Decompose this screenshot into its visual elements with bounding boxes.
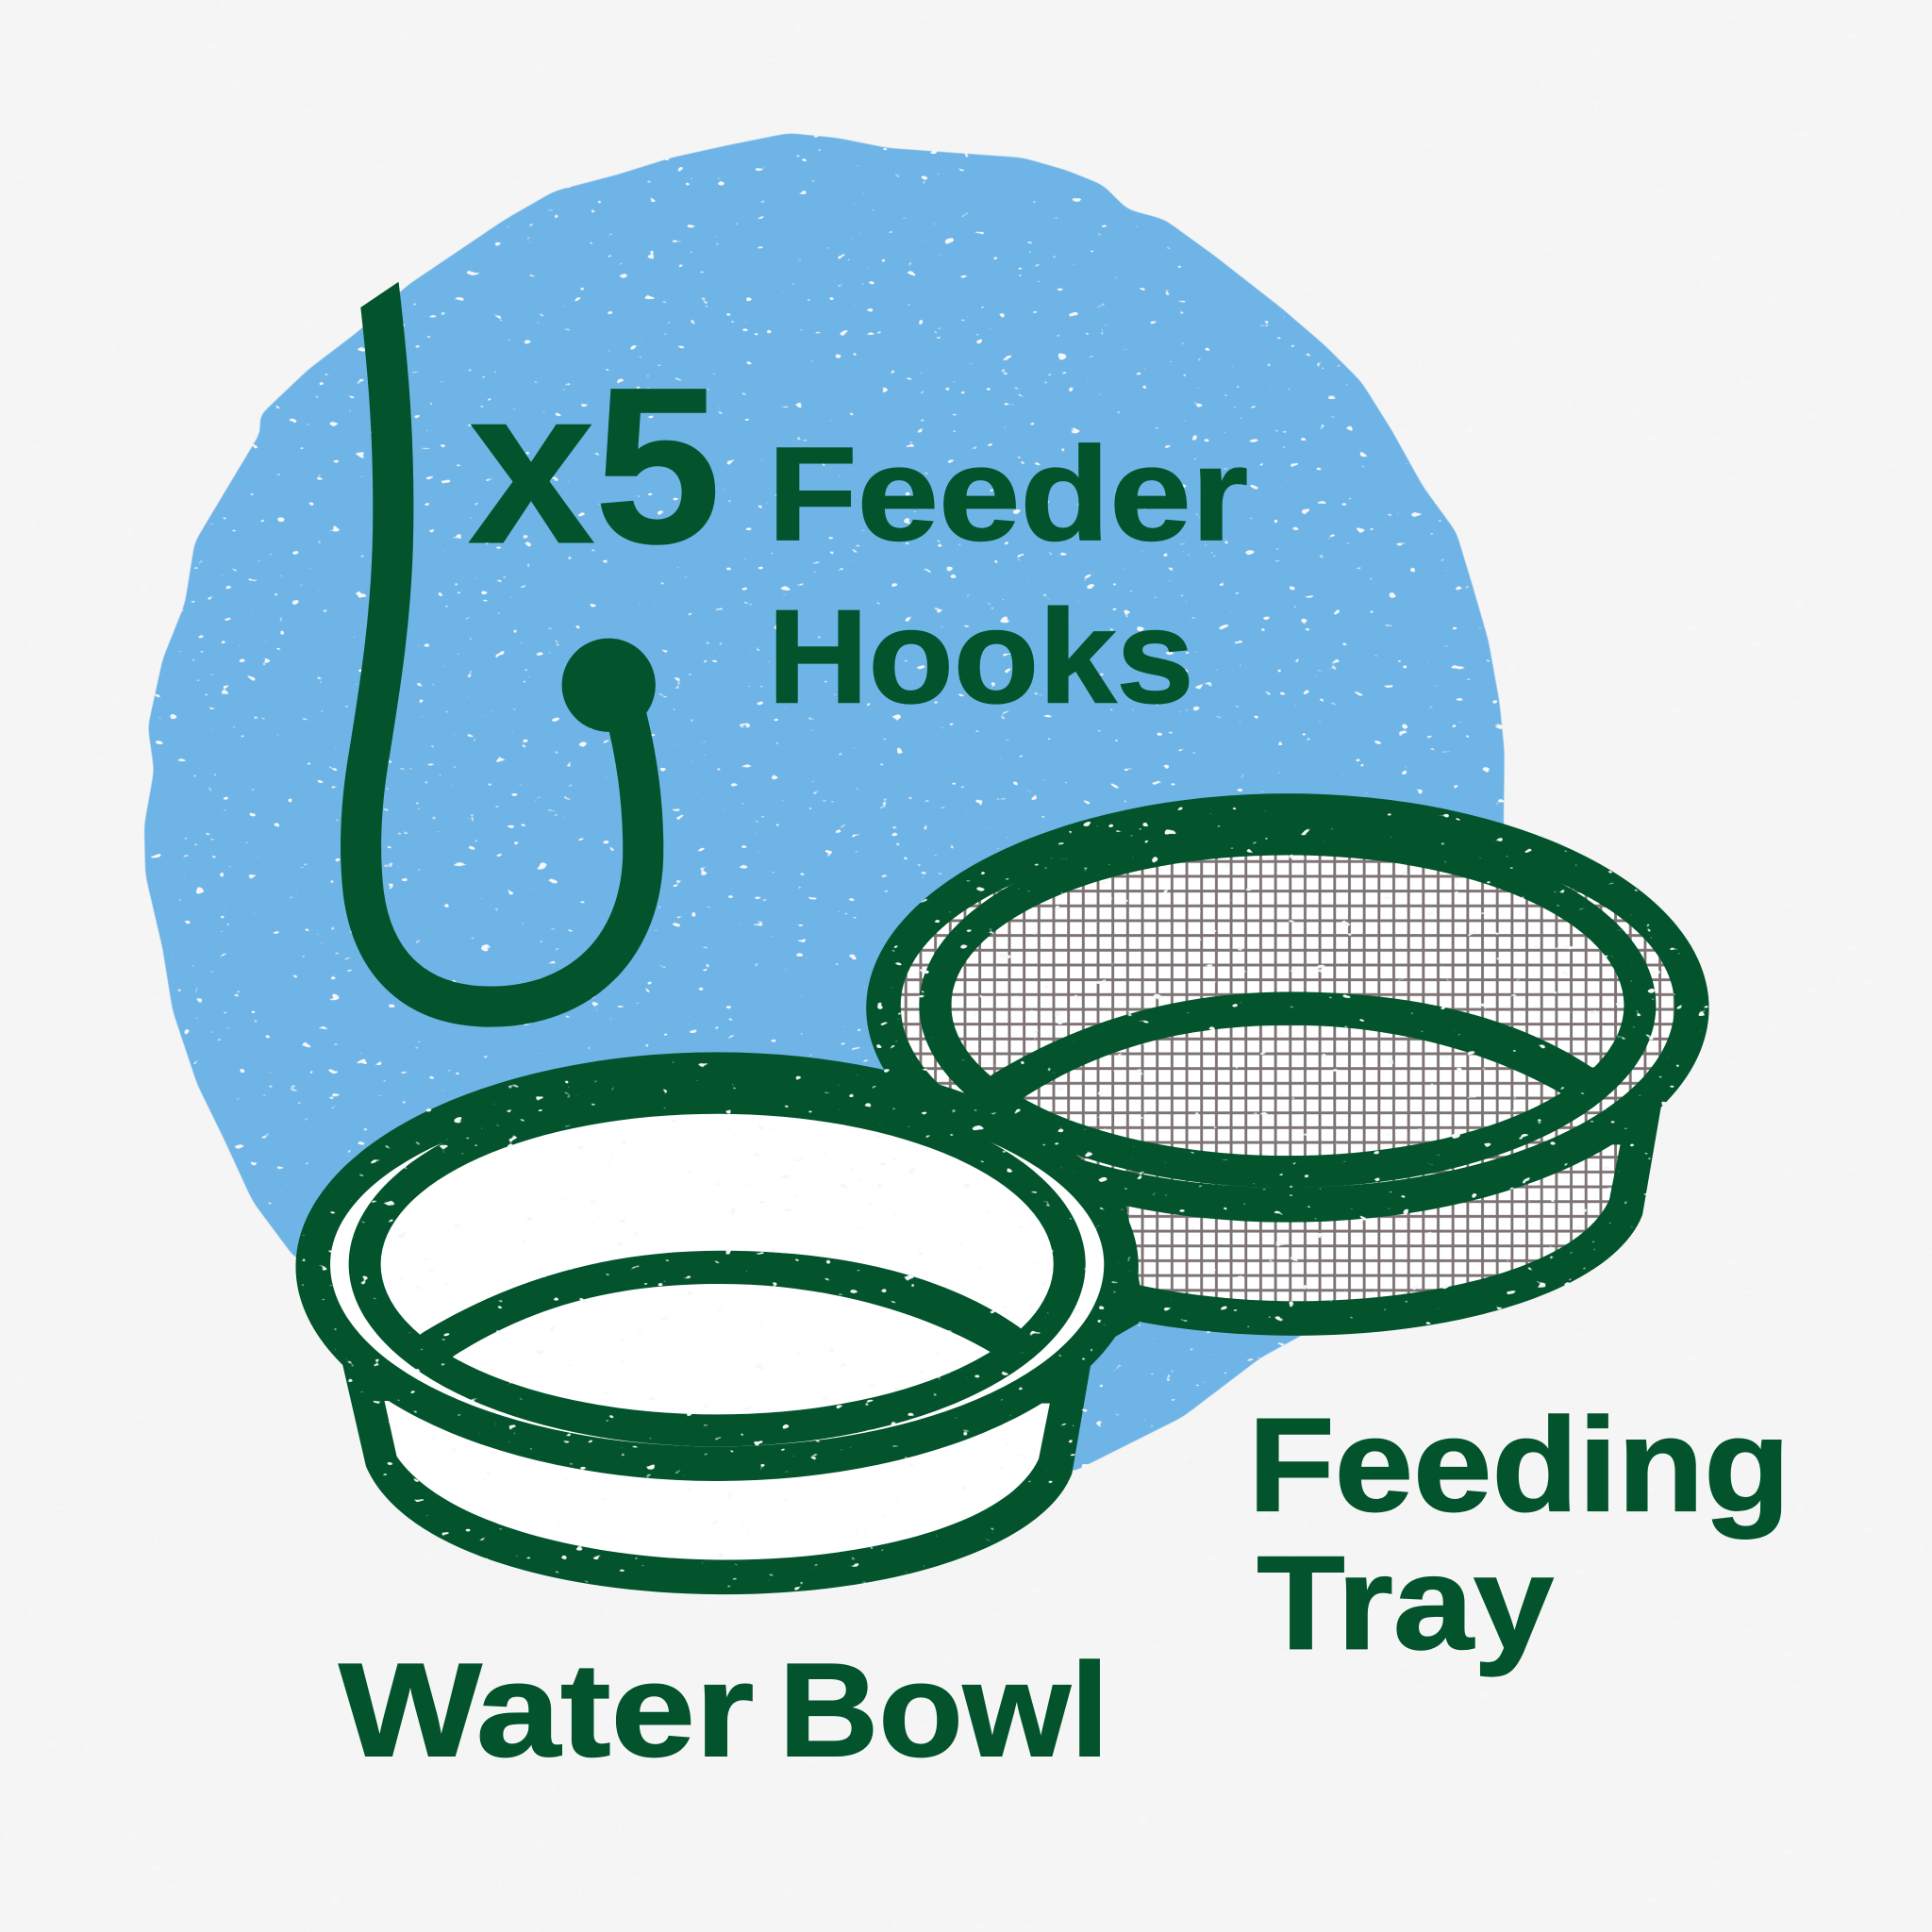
blue textured blob xyxy=(144,133,1505,1473)
label: x5 count: x5 xyxy=(468,341,721,590)
label: Feeder Hooks: Hooks xyxy=(768,581,1194,730)
tray rim xyxy=(866,793,1709,1223)
label: Water Bowl: Bowl xyxy=(778,1635,1109,1784)
label: Feeding Tray: Feeding xyxy=(1248,1390,1790,1539)
icon: water bowl xyxy=(295,1052,1139,1594)
bowl back wall arc xyxy=(400,1251,1042,1375)
label: Feeding Tray xyxy=(1248,1390,1790,1677)
label: Feeding Tray: Tray xyxy=(1257,1528,1554,1677)
label: Water Bowl: Water xyxy=(339,1635,754,1784)
label: Feeder Hooks: Feeder xyxy=(768,419,1248,568)
bowl body xyxy=(341,1359,1091,1594)
tray back wall arc xyxy=(971,991,1617,1116)
icon: feeder hook xyxy=(361,253,656,1007)
tray body xyxy=(912,1100,1662,1343)
icon: feeding tray xyxy=(866,793,1709,1343)
label: Feeder Hooks xyxy=(768,419,1248,730)
bowl rim xyxy=(295,1052,1139,1481)
label: Water Bowl xyxy=(339,1635,1109,1784)
